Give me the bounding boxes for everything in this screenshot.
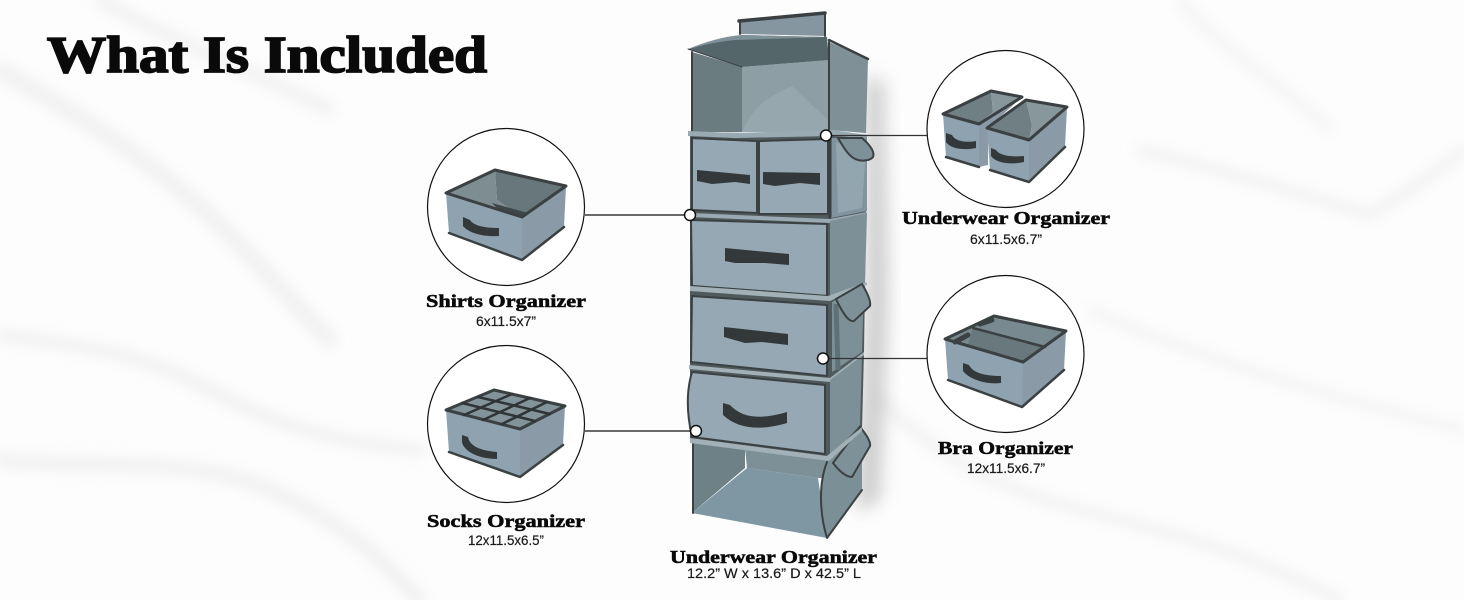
drawer 3 [691, 296, 827, 376]
product: hanging organizer tower [688, 13, 873, 538]
flap [836, 284, 870, 321]
handle [763, 172, 820, 186]
connector: shirts organizer [585, 210, 696, 220]
handle [991, 148, 1024, 163]
tower body backing [690, 132, 867, 538]
side panel 3 [832, 284, 870, 372]
handle [697, 170, 750, 184]
label: tower underwear organizer: 12.2” W x 13.6” D x 42.5” L [687, 566, 862, 581]
open bottom compartment [692, 427, 870, 538]
label: underwear organizer: Underwear Organizer [902, 208, 1110, 228]
label: shirts organizer [426, 291, 586, 329]
circle: shirts organizer [428, 128, 584, 286]
connector: bra organizer [818, 353, 927, 364]
shelf 1 [688, 130, 867, 138]
flap [838, 138, 873, 161]
label: bra organizer: 12x11.5x6.7” [967, 461, 1045, 476]
icon: small box left [943, 91, 1022, 167]
label: tower underwear organizer: Underwear Organizer [670, 547, 877, 567]
label: shirts organizer: 6x11.5x7” [476, 314, 536, 329]
label: socks organizer: 12x11.5x6.5” [468, 533, 544, 548]
shelf 2 [691, 212, 867, 223]
handle [462, 435, 497, 459]
label: bra organizer [938, 438, 1073, 476]
label: underwear organizer [902, 208, 1110, 247]
side panel 2 [830, 213, 867, 297]
handle [723, 403, 787, 428]
label: underwear organizer: 6x11.5x6.7” [970, 232, 1042, 247]
title: What Is Included [47, 27, 487, 84]
connector: underwear organizer [820, 130, 927, 141]
handle [963, 363, 1001, 383]
label: shirts organizer: Shirts Organizer [426, 291, 586, 311]
icon: socks box [446, 390, 565, 477]
circle: underwear organizer pair [927, 50, 1084, 208]
circle: bra organizer [927, 276, 1084, 432]
small drawer left [692, 138, 757, 213]
shelf 5 [690, 427, 862, 461]
icon: shirts box [446, 170, 566, 260]
top compartment [688, 35, 868, 133]
small drawer right [759, 139, 828, 214]
handle [946, 133, 976, 149]
label: bra organizer: Bra Organizer [938, 438, 1073, 458]
icon: small box right [987, 100, 1067, 182]
handle [724, 327, 788, 345]
side panel 4 [830, 356, 862, 458]
hanging strap [739, 13, 825, 36]
drawer 2 [691, 220, 827, 296]
label: socks organizer [427, 511, 585, 548]
label: tower underwear organizer [670, 547, 877, 581]
shelf 4 [689, 352, 864, 382]
connector: socks organizer [585, 426, 702, 436]
flap [833, 427, 870, 477]
handle [463, 217, 499, 236]
circle: socks organizer [428, 346, 584, 502]
side panel upper [830, 137, 873, 218]
icon: bra box [945, 316, 1066, 407]
label: socks organizer: Socks Organizer [427, 511, 585, 531]
tower shadow [856, 78, 888, 512]
handle [725, 248, 789, 265]
drawer 4 [688, 372, 825, 454]
shelf 3 [690, 282, 867, 301]
